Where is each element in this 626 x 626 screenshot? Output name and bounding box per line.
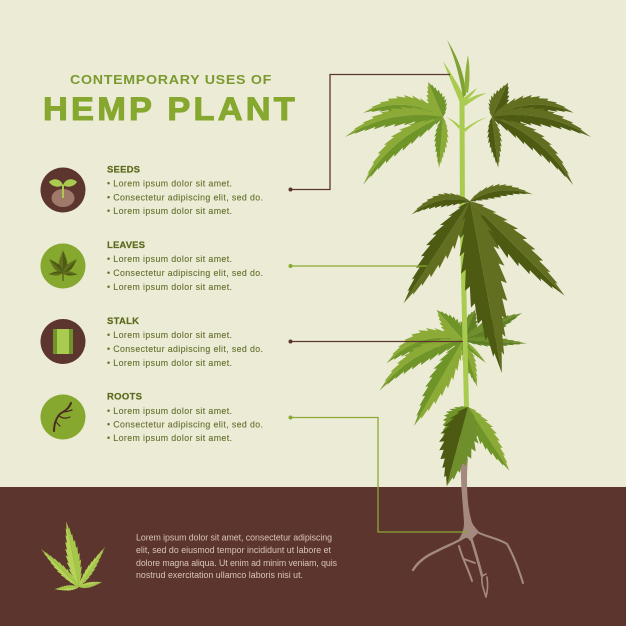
soil band bbox=[0, 487, 626, 626]
text: leaves: • Consectetur adipiscing elit, sed do. bbox=[107, 268, 263, 278]
connector: leaves bbox=[288, 264, 427, 268]
top-right leaf bbox=[483, 78, 595, 186]
text: leaves: LEAVES bbox=[107, 240, 145, 251]
text: seeds bbox=[107, 164, 263, 216]
text: leaves bbox=[107, 240, 263, 292]
text: leaves: • Lorem ipsum dolor sit amet. bbox=[107, 282, 232, 292]
text: roots: ROOTS bbox=[107, 392, 142, 402]
text: seeds: • Lorem ipsum dolor sit amet. bbox=[107, 178, 232, 188]
text: leaves: • Lorem ipsum dolor sit amet. bbox=[107, 254, 232, 264]
middle leaf bbox=[392, 180, 575, 377]
text: stalk: STALK bbox=[107, 316, 139, 327]
paragraph: nostrud exercitation ullamco laboris nisi ut. bbox=[136, 570, 303, 580]
text: seeds: • Lorem ipsum dolor sit amet. bbox=[107, 206, 232, 216]
subtitle: CONTEMPORARY USES OF bbox=[70, 73, 272, 87]
paragraph: Lorem ipsum dolor sit amet, consectetur adipiscing bbox=[136, 532, 332, 542]
text: roots: • Consectetur adipiscing elit, sed do. bbox=[107, 420, 263, 430]
text: stalk bbox=[107, 316, 263, 368]
icon: roots bbox=[40, 394, 86, 440]
lower leaf pair bbox=[369, 303, 527, 432]
text: stalk: • Lorem ipsum dolor sit amet. bbox=[107, 358, 232, 368]
top sprouts bbox=[443, 40, 488, 132]
icon: bottom leaf bbox=[38, 520, 109, 592]
text: roots: • Lorem ipsum dolor sit amet. bbox=[107, 433, 232, 443]
icon: leaves bbox=[40, 244, 86, 288]
bottom leaf bbox=[428, 398, 518, 491]
stem bbox=[460, 98, 469, 408]
connector: seeds bbox=[288, 74, 450, 192]
text: seeds: SEEDS bbox=[107, 164, 140, 176]
connector: stalk bbox=[288, 340, 463, 344]
paragraph: dolore magna aliqua. Ut enim ad minim veniam, quis bbox=[136, 558, 338, 568]
text: roots: • Lorem ipsum dolor sit amet. bbox=[107, 406, 232, 416]
text: roots bbox=[107, 392, 263, 443]
main heading: HEMP PLANT bbox=[43, 91, 298, 127]
text: seeds: • Consectetur adipiscing elit, sed do. bbox=[107, 192, 263, 202]
text: stalk: • Lorem ipsum dolor sit amet. bbox=[107, 330, 232, 340]
title bbox=[43, 73, 298, 127]
icon: seeds bbox=[40, 168, 86, 212]
roots bbox=[413, 458, 523, 597]
plant bbox=[341, 40, 595, 597]
paragraph bbox=[136, 532, 338, 580]
icon: stalk bbox=[40, 319, 86, 364]
text: stalk: • Consectetur adipiscing elit, sed do. bbox=[107, 344, 263, 354]
paragraph: elit, sed do eiusmod tempor incididunt ut labore et bbox=[136, 545, 332, 555]
connector: roots bbox=[288, 416, 468, 532]
top-left leaf bbox=[341, 78, 452, 186]
